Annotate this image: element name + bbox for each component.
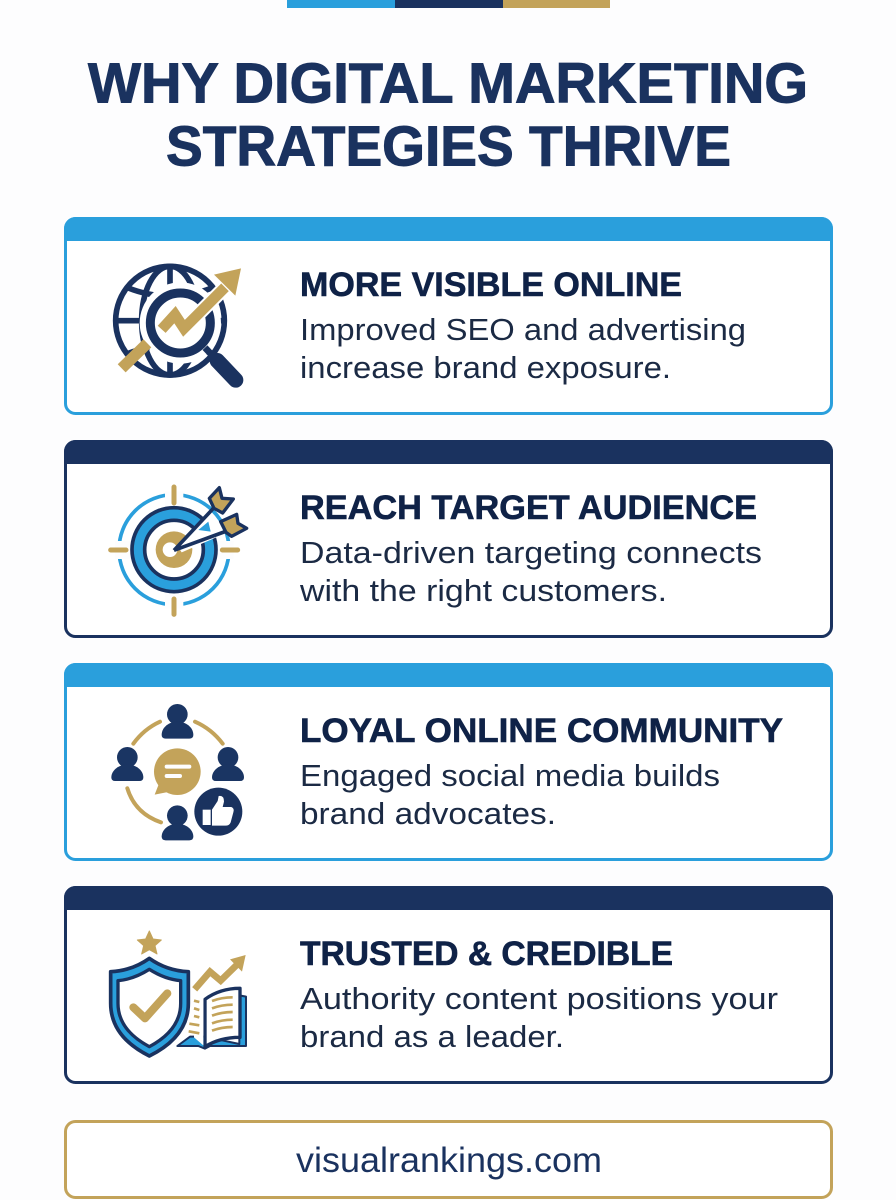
icon: target and arrows (108, 484, 248, 617)
title (88, 52, 808, 178)
heading: LOYAL ONLINE COMMUNITY (300, 712, 783, 750)
footer: website (66, 1122, 832, 1198)
description: with the right customers. (299, 573, 667, 608)
panel: reach target audience (64, 440, 833, 636)
heading: MORE VISIBLE ONLINE (300, 266, 682, 304)
description: Authority content positions your (300, 981, 778, 1016)
description (300, 981, 778, 1054)
icon: globe, magnifier and growth arrow (112, 264, 244, 388)
panel: trusted and credible (64, 886, 833, 1082)
description: increase brand exposure. (300, 350, 671, 385)
description (300, 758, 720, 831)
description: Engaged social media builds (300, 758, 720, 793)
description: brand as a leader. (300, 1019, 564, 1054)
panel: more visible online (64, 217, 833, 414)
footer: website: visualrankings.com (296, 1141, 602, 1180)
heading: REACH TARGET AUDIENCE (300, 489, 757, 527)
description (299, 535, 762, 608)
description: Data-driven targeting connects (300, 535, 762, 570)
title: STRATEGIES THRIVE (166, 114, 731, 178)
panel: loyal online community (64, 663, 833, 860)
heading: TRUSTED & CREDIBLE (300, 935, 673, 973)
description: brand advocates. (300, 796, 556, 831)
icon: community with chat and like (111, 704, 244, 840)
description: Improved SEO and advertising (300, 312, 746, 347)
top tricolor bar (287, 0, 610, 8)
description (300, 312, 746, 385)
title: WHY DIGITAL MARKETING (88, 52, 808, 114)
icon: shield, star, book and arrow (108, 930, 247, 1058)
